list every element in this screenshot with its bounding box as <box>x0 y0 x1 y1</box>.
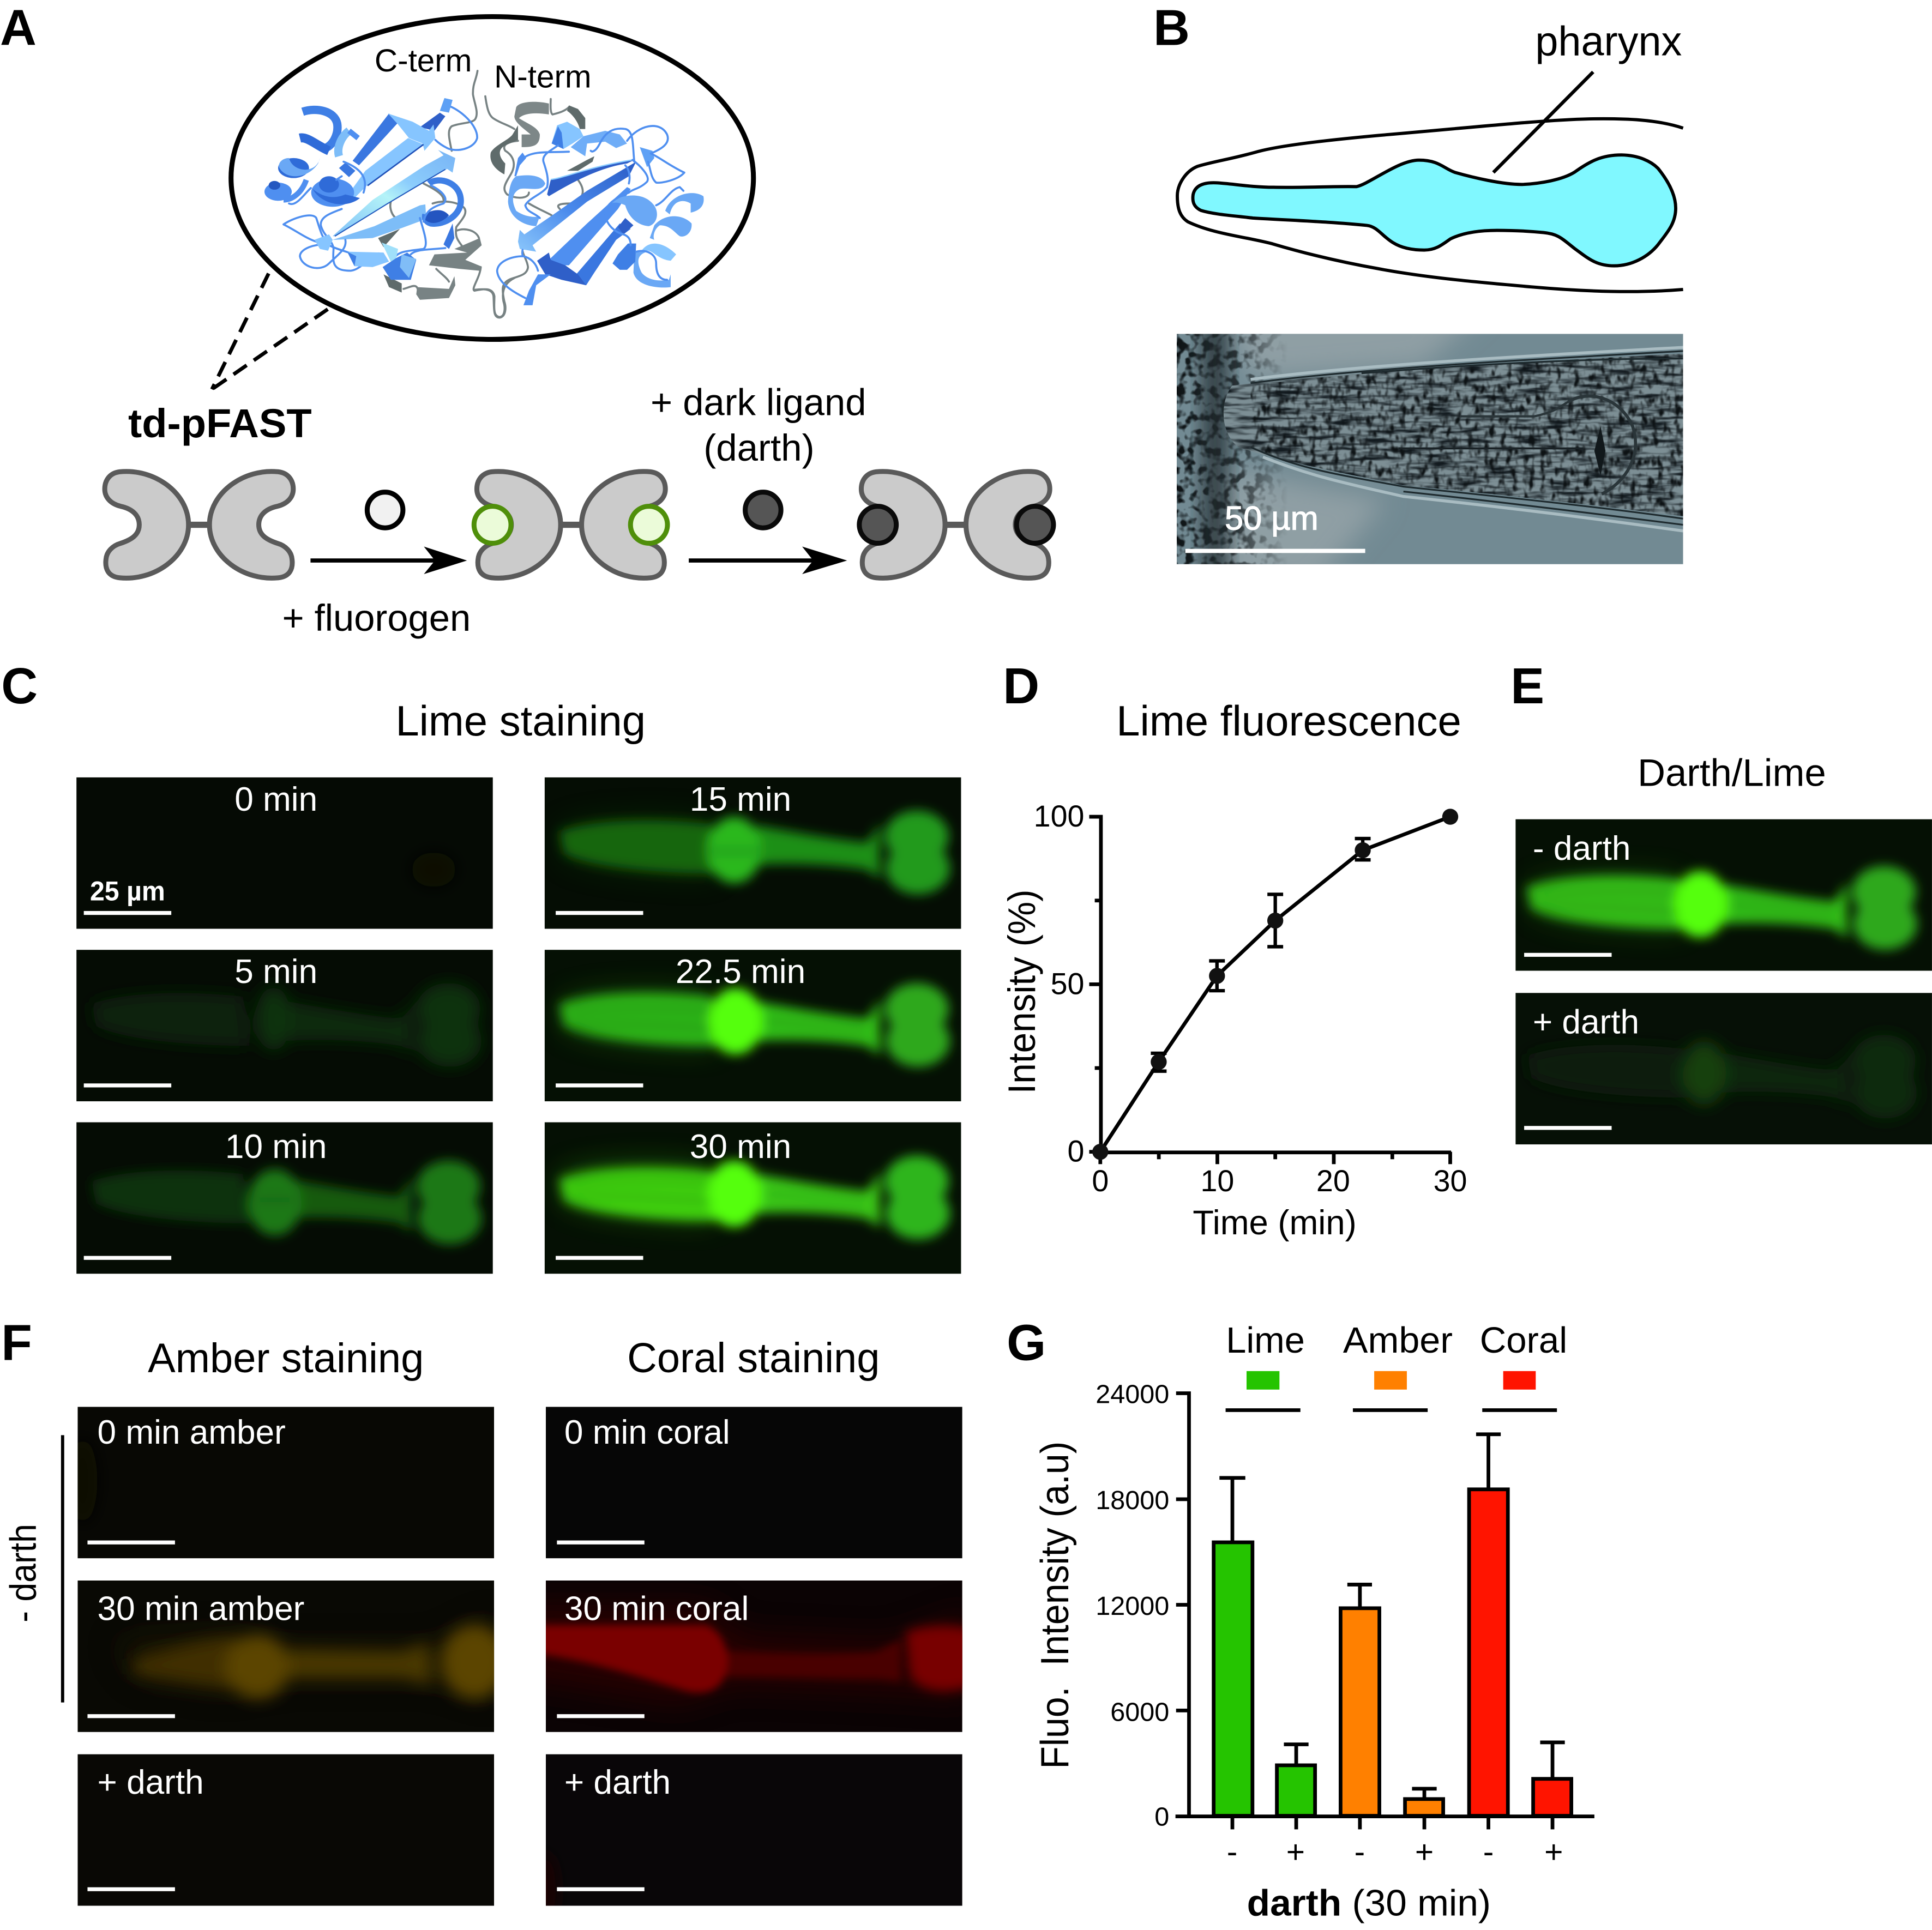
x tick labels: - <box>1227 1834 1237 1869</box>
free fluorogen <box>367 492 403 528</box>
bars <box>1214 1489 1572 1816</box>
image coral 30 min: 30 min coral <box>564 1590 749 1627</box>
brightfield micrograph <box>1177 334 1683 564</box>
image plus darth: + darth <box>1533 1004 1639 1041</box>
error bars <box>1219 1434 1565 1799</box>
label dark ligand: + dark ligand <box>651 381 866 423</box>
x tick labels: 20 <box>1316 1164 1350 1198</box>
axes <box>1089 815 1451 1164</box>
image 0 min: 0 min <box>234 781 317 818</box>
y tick labels: 50 <box>1051 967 1084 1000</box>
dimer empty <box>105 472 293 578</box>
axes <box>1176 1391 1594 1829</box>
pharynx leader line <box>1494 72 1593 172</box>
image coral plus darth: + darth <box>564 1764 671 1801</box>
image 0 min <box>76 777 493 929</box>
data line with error bars <box>1092 809 1458 1160</box>
x tick labels: + <box>1415 1834 1434 1869</box>
title coral staining: Coral staining <box>627 1335 880 1382</box>
image 5 min <box>76 950 493 1101</box>
y axis title: Intensity (%) <box>1001 889 1043 1094</box>
x tick labels <box>1092 1164 1467 1198</box>
title darth/lime: Darth/Lime <box>1638 751 1826 794</box>
image 5 min: 5 min <box>234 953 317 991</box>
panel F: amber and coral staining <box>1 1314 983 1927</box>
dimer with fluorogen <box>474 472 667 578</box>
pharynx shape <box>1193 155 1676 266</box>
label A: A <box>0 0 37 56</box>
x tick labels: + <box>1286 1834 1305 1869</box>
worm body outline <box>1177 119 1683 292</box>
scale bar 50 um <box>1185 549 1365 553</box>
x tick labels: 30 <box>1434 1164 1467 1198</box>
dashed callout lines <box>212 274 328 389</box>
y tick labels: 0 <box>1154 1802 1169 1832</box>
minus darth bracket: - darth <box>3 1524 44 1623</box>
label fluorogen: + fluorogen <box>282 597 471 639</box>
y tick labels: 0 <box>1067 1135 1084 1168</box>
y axis title: Fluo. Intensity (a.u) <box>1033 1442 1077 1769</box>
label F: F <box>1 1314 32 1371</box>
image 22.5 min <box>545 950 961 1101</box>
panel B: pharynx schematic and micrograph <box>1153 0 1683 589</box>
x tick labels: - <box>1483 1834 1494 1869</box>
panel A: td-pFAST structure and ligand exchange <box>0 0 1054 639</box>
image 0 min: 25 µm <box>90 876 165 907</box>
callout ellipse <box>231 17 754 339</box>
y tick labels: 6000 <box>1110 1698 1169 1727</box>
legend: Amber <box>1343 1320 1453 1361</box>
scale label 50 um: 50 µm <box>1225 500 1319 537</box>
image amber plus darth: + darth <box>98 1764 204 1801</box>
arrow darth <box>689 547 847 574</box>
image amber 0 min <box>68 1407 494 1558</box>
protein monomer left <box>264 71 514 317</box>
x axis title: Time (min) <box>1193 1204 1357 1242</box>
image amber 30 min: 30 min amber <box>98 1590 304 1627</box>
panel E: darth/lime images <box>1510 658 1932 1144</box>
protein monomer right <box>474 96 704 318</box>
pharynx label: pharynx <box>1535 19 1682 65</box>
image coral plus darth <box>531 1754 962 1927</box>
image 15 min <box>545 777 961 929</box>
label dark ligand <box>651 381 866 469</box>
panel C: lime staining <box>1 658 961 1274</box>
y tick labels: 100 <box>1034 799 1084 833</box>
image minus darth: - darth <box>1533 830 1630 867</box>
image amber plus darth <box>77 1754 494 1905</box>
image plus darth <box>1515 993 1932 1144</box>
image 15 min: 15 min <box>690 781 791 818</box>
dimer with darth <box>859 472 1054 578</box>
C-term label: C-term <box>375 43 472 79</box>
label dark ligand: (darth) <box>703 427 815 469</box>
panel D: lime fluorescence chart <box>1001 658 1467 1242</box>
label E: E <box>1510 658 1544 714</box>
label D: D <box>1003 658 1039 714</box>
label C: C <box>1 658 38 714</box>
N-term label: N-term <box>494 59 592 94</box>
image 10 min <box>76 1122 493 1274</box>
image amber 0 min: 0 min amber <box>98 1414 286 1451</box>
panel G: bar chart <box>1007 1314 1594 1924</box>
image 30 min <box>545 1122 961 1274</box>
image coral 0 min <box>546 1407 962 1558</box>
image coral 0 min: 0 min coral <box>564 1414 730 1451</box>
title amber staining: Amber staining <box>148 1335 424 1382</box>
image 30 min: 30 min <box>690 1128 791 1166</box>
arrow fluorogen <box>310 547 467 574</box>
free darth ligand <box>745 492 781 528</box>
x axis title: darth (30 min) <box>1247 1883 1491 1924</box>
label G: G <box>1007 1314 1046 1371</box>
legend: Coral <box>1480 1320 1567 1361</box>
image 10 min: 10 min <box>225 1128 327 1166</box>
title lime staining: Lime staining <box>395 697 646 745</box>
y tick labels: 12000 <box>1096 1591 1169 1621</box>
x tick labels: 0 <box>1092 1164 1109 1198</box>
label B: B <box>1153 0 1190 56</box>
x tick labels: 10 <box>1201 1164 1234 1198</box>
image 22.5 min: 22.5 min <box>676 953 805 991</box>
title lime fluorescence: Lime fluorescence <box>1116 697 1461 745</box>
y tick labels: 24000 <box>1096 1380 1169 1409</box>
y tick labels: 18000 <box>1096 1486 1169 1515</box>
image minus darth <box>1515 819 1932 971</box>
y tick labels <box>1034 799 1084 1168</box>
x tick labels <box>1227 1834 1563 1869</box>
y tick labels <box>1096 1380 1169 1832</box>
legend <box>1226 1320 1567 1410</box>
x tick labels: + <box>1544 1834 1563 1869</box>
image amber 30 min <box>77 1581 508 1732</box>
image coral 30 min <box>521 1581 983 1732</box>
td-pFAST label: td-pFAST <box>128 401 312 446</box>
legend: Lime <box>1226 1320 1305 1361</box>
x tick labels: - <box>1355 1834 1365 1869</box>
